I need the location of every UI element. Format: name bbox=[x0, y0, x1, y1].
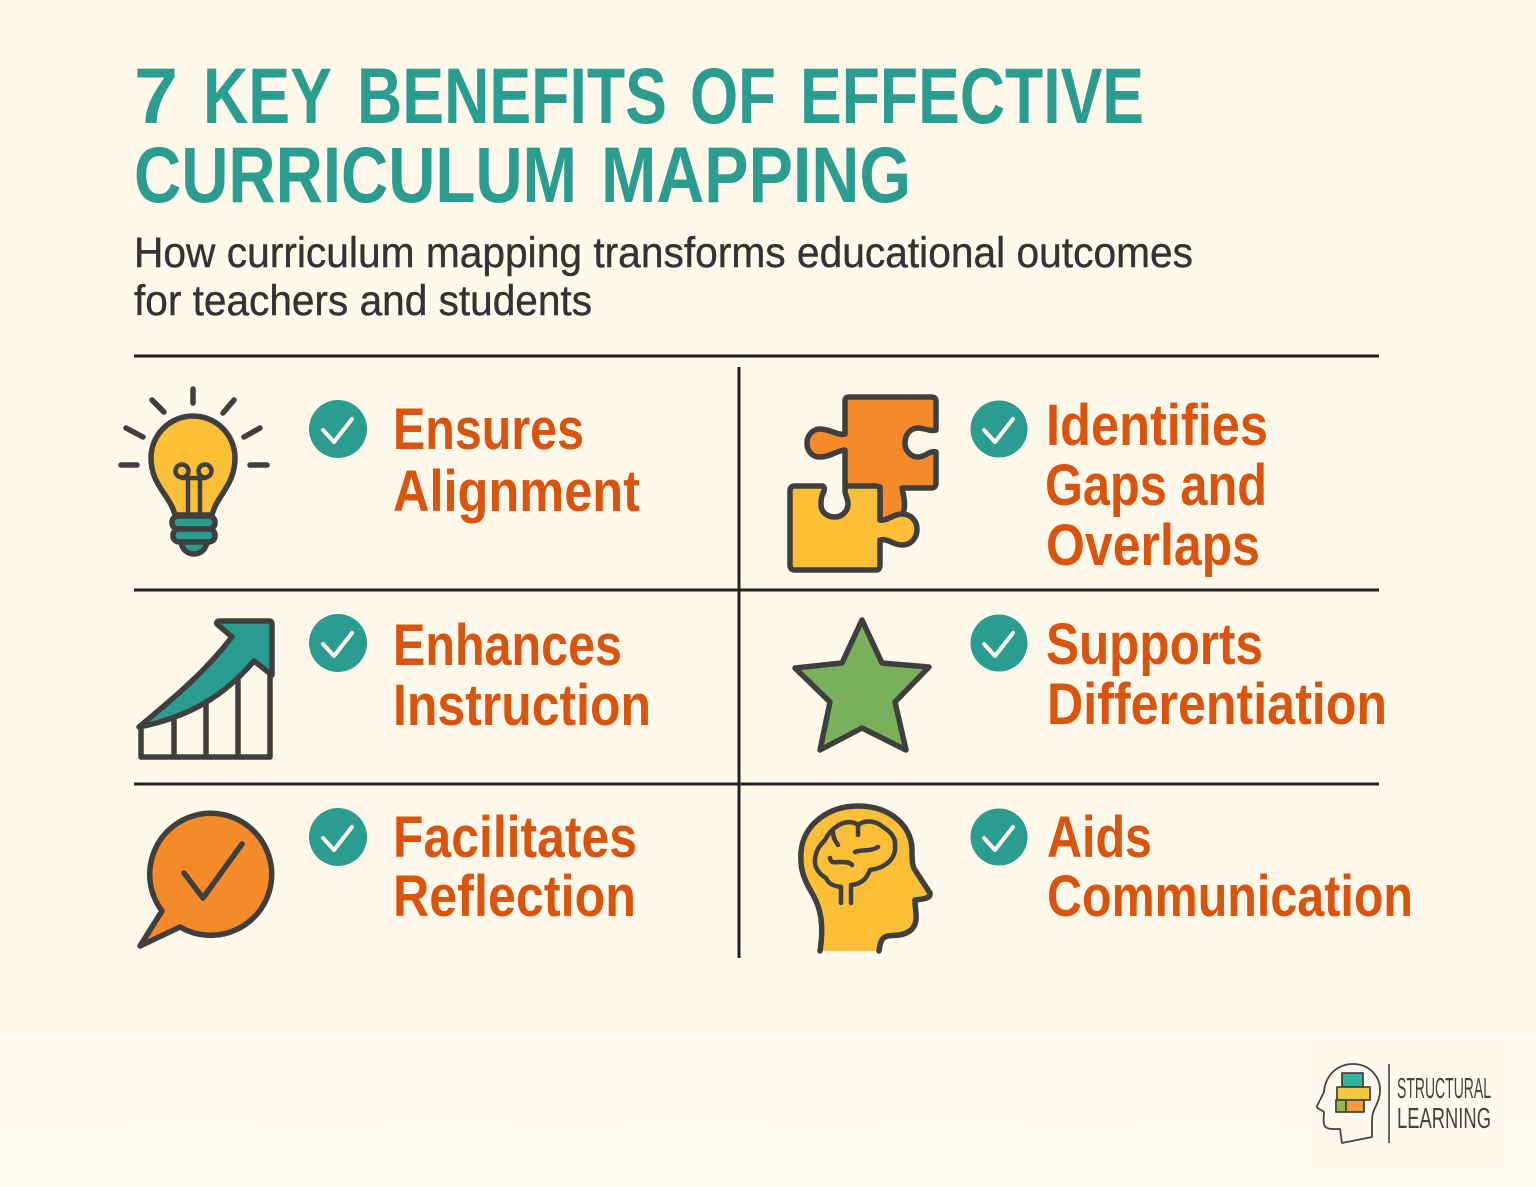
icon: puzzle pieces bbox=[790, 397, 936, 570]
subtitle: for teachers and students bbox=[134, 277, 592, 325]
heading: aids communication: Communication bbox=[1047, 864, 1413, 929]
icon: check badge bbox=[309, 614, 367, 672]
heading: identifies gaps and overlaps bbox=[1045, 393, 1268, 578]
heading: identifies gaps and overlaps: Overlaps bbox=[1046, 513, 1260, 578]
title: MAPPING bbox=[601, 130, 911, 219]
title: KEY bbox=[203, 51, 332, 140]
heading: supports differentiation: Supports bbox=[1046, 612, 1263, 677]
heading: facilitates reflection: Facilitates bbox=[393, 805, 637, 870]
panel: ensures alignment bbox=[121, 389, 640, 554]
panel: supports differentiation bbox=[795, 612, 1387, 750]
heading: facilitates reflection bbox=[393, 805, 637, 929]
icon: star bbox=[795, 620, 929, 750]
heading: enhances instruction: Enhances bbox=[393, 613, 622, 678]
title: 7 bbox=[134, 51, 178, 140]
heading: aids communication: Aids bbox=[1047, 805, 1152, 870]
heading: enhances instruction bbox=[393, 613, 651, 738]
icon: check badge bbox=[970, 400, 1028, 458]
icon: check badge bbox=[309, 400, 367, 458]
subtitle: How curriculum mapping transforms educational outcomes bbox=[134, 229, 1193, 277]
panel: identifies gaps and overlaps bbox=[790, 393, 1268, 578]
icon: check badge bbox=[309, 808, 367, 866]
panel: aids communication bbox=[801, 805, 1413, 951]
heading: ensures alignment bbox=[393, 397, 640, 524]
heading: facilitates reflection: Reflection bbox=[393, 864, 636, 929]
icon: speech bubble with check bbox=[140, 813, 272, 946]
title bbox=[134, 51, 1144, 219]
title: OF bbox=[690, 51, 776, 140]
heading: aids communication bbox=[1047, 805, 1413, 929]
heading: supports differentiation bbox=[1046, 612, 1387, 737]
heading: supports differentiation: Differentiation bbox=[1047, 672, 1387, 737]
heading: identifies gaps and overlaps: Gaps and bbox=[1045, 453, 1267, 518]
title: CURRICULUM bbox=[134, 130, 577, 219]
icon: logo head bbox=[1317, 1064, 1380, 1143]
title: BENEFITS bbox=[357, 51, 667, 140]
subtitle bbox=[134, 229, 1193, 325]
heading: ensures alignment: Ensures bbox=[393, 397, 584, 462]
icon: check badge bbox=[970, 614, 1028, 672]
icon: head with brain bbox=[801, 806, 930, 951]
icon: light bulb bbox=[121, 389, 267, 554]
logo: structural learning bbox=[1306, 1040, 1506, 1171]
heading: ensures alignment: Alignment bbox=[393, 459, 640, 524]
title: EFFECTIVE bbox=[800, 51, 1144, 140]
panel: facilitates reflection bbox=[140, 805, 637, 946]
icon: growth chart bbox=[139, 621, 272, 757]
icon: check badge bbox=[970, 808, 1028, 866]
panel: enhances instruction bbox=[139, 613, 651, 757]
heading: identifies gaps and overlaps: Identifies bbox=[1046, 393, 1268, 458]
heading: enhances instruction: Instruction bbox=[393, 673, 651, 738]
logo wordmark bbox=[1397, 1073, 1491, 1135]
